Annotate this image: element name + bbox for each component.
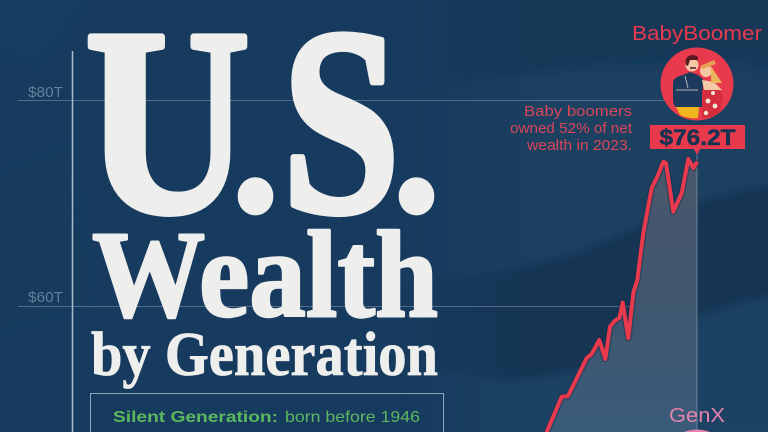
line: baby boomer wealth (547, 159, 696, 432)
icon: Gen X circle (684, 430, 710, 432)
title: by Generation: by Generation (91, 321, 438, 389)
annotation: baby boomers share (510, 103, 633, 154)
annotation: baby boomers share: wealth in 2023. (526, 137, 632, 154)
label: GenX: GenX (669, 405, 725, 427)
chart: baby boomer wealth area (547, 155, 697, 432)
title: U.S.: . (228, 3, 283, 263)
legend box (90, 394, 444, 432)
background (493, 0, 768, 376)
legend: silent generation: born before 1946 (285, 409, 420, 426)
gridline and label: $60T: $60T (28, 289, 63, 306)
gridline and label: $80T: $80T (28, 84, 63, 101)
legend: silent generation: Silent Generation: (113, 409, 278, 426)
label: BabyBoomer: BabyBoomer (632, 23, 762, 45)
y axis (72, 51, 74, 432)
title: U.S. (85, 0, 444, 269)
value callout: $76.2T (650, 125, 745, 155)
annotation: baby boomers share: Baby boomers (524, 103, 632, 120)
annotation: baby boomers share: owned 52% of net (510, 120, 633, 137)
value callout: $76.2T: $76.2T (660, 125, 736, 150)
woman (702, 86, 723, 117)
icon: baby boomer couple (660, 48, 734, 120)
title: U.S.: . (389, 3, 444, 263)
man (673, 72, 703, 107)
title: Wealth: Wealth (92, 206, 438, 343)
